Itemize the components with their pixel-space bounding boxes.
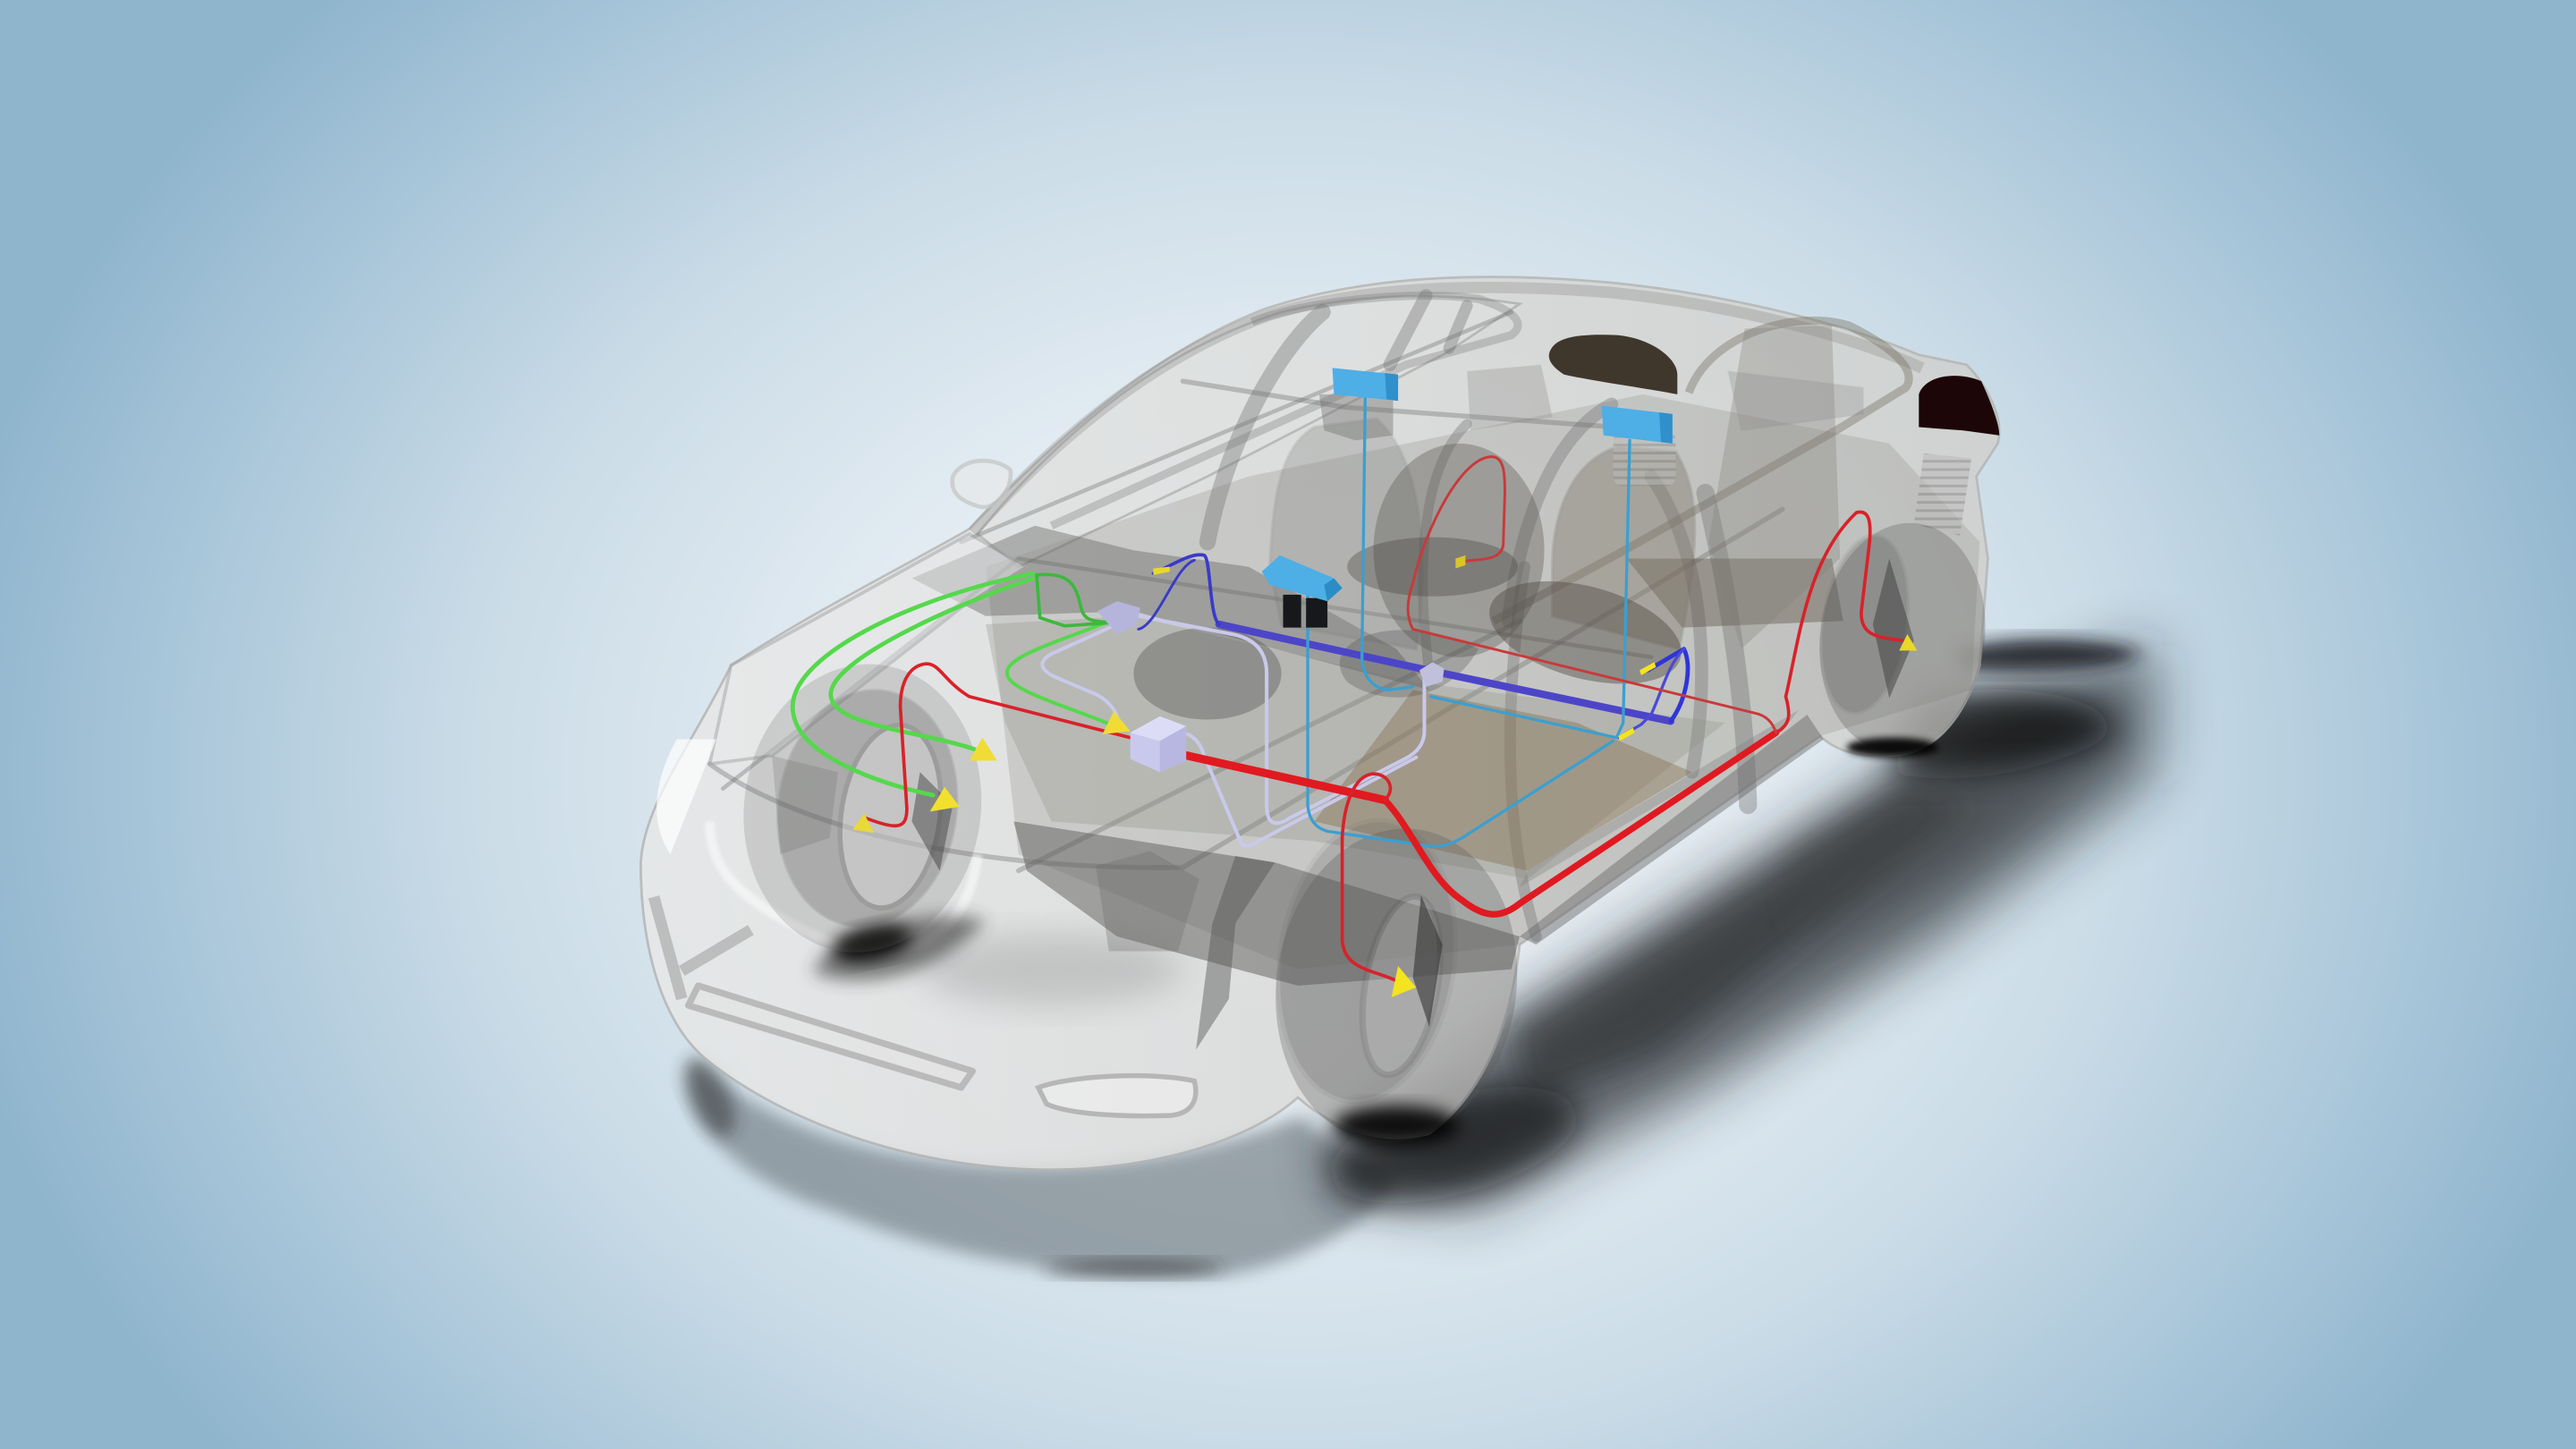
car body shell <box>640 277 1999 1170</box>
tail light <box>1919 376 1999 436</box>
rear seat upper panel <box>1467 365 1553 430</box>
floor seat shade <box>1096 851 1199 951</box>
wheel: front right <box>1256 811 1538 1158</box>
roof opening band <box>1052 296 1518 526</box>
wheel: front left <box>725 648 1000 968</box>
wheel arch white band <box>709 821 978 953</box>
ground shadows <box>674 639 2152 1276</box>
windshield glass <box>978 296 1520 567</box>
floor brown tint <box>1314 690 1692 870</box>
lower bumper strip <box>689 986 972 1088</box>
rear grille <box>1914 453 1971 536</box>
dark sunroof panel <box>1549 335 1677 394</box>
module: central blue box with black connectors <box>1262 555 1343 628</box>
sensors: yellow cones <box>852 555 1917 997</box>
front seat right <box>1553 447 1695 649</box>
parcel shelf <box>1728 371 1863 430</box>
side mirror <box>953 461 1011 507</box>
module: blue box on right headrest <box>1602 406 1673 444</box>
junction box: rear <box>1419 662 1444 687</box>
door sill <box>1520 715 1824 945</box>
steering area <box>1374 444 1545 657</box>
dashboard band <box>911 526 1429 690</box>
headlight highlight <box>657 740 716 854</box>
control box: lavender cube <box>1131 716 1186 772</box>
roof edge band <box>972 287 1922 532</box>
wire: thin red front wheel <box>866 664 1131 826</box>
wire: light blue lines <box>1308 396 1630 846</box>
front edge ribs <box>654 897 750 999</box>
cabin tint <box>986 394 1979 970</box>
tapered door ribbon <box>1196 856 1275 1050</box>
interior pillars <box>709 296 1783 936</box>
underbody haze <box>920 933 1182 1005</box>
front seat left <box>1270 419 1422 649</box>
junction box: front <box>1097 601 1140 634</box>
rear seat <box>1708 326 1840 649</box>
rear window band <box>1494 320 1909 621</box>
fog lamp <box>1038 1076 1196 1116</box>
module: blue box on left headrest <box>1333 368 1398 401</box>
under-wheel dark patch <box>813 916 986 980</box>
lower door band <box>1013 821 1520 986</box>
wire: green front harness <box>792 573 1111 795</box>
hood panel <box>709 534 1027 764</box>
wire: lavender harness <box>1042 616 1424 846</box>
headrest left <box>1319 394 1394 440</box>
wire: red main cable <box>1173 457 1904 981</box>
wire: dark blue trunk <box>1139 555 1688 738</box>
headrest right <box>1614 430 1675 487</box>
door panel <box>986 616 1725 879</box>
wheel: rear right <box>1805 513 2000 763</box>
